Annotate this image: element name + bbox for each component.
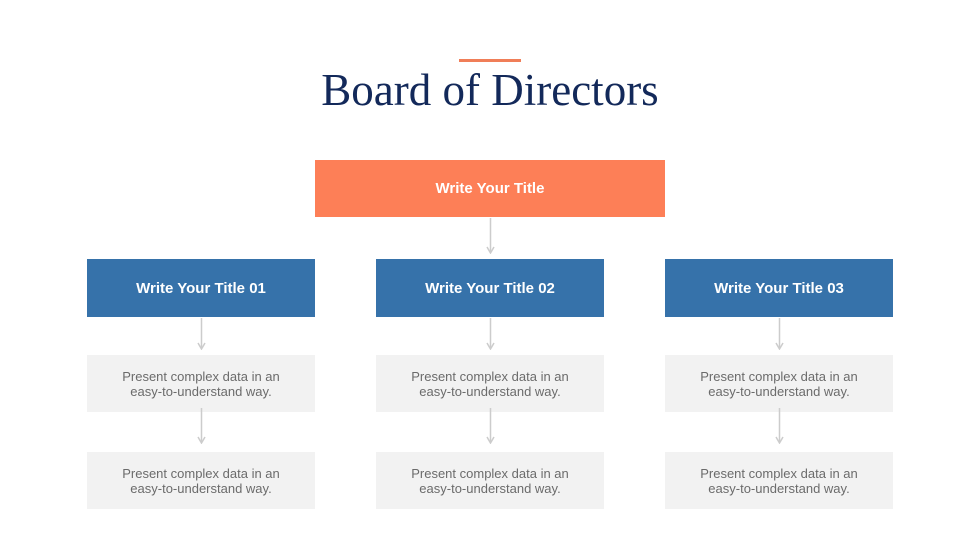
column 2 [376, 259, 604, 509]
arrow [776, 318, 784, 350]
title box 02 [376, 259, 604, 317]
title box 02: Write Your Title 02 [425, 280, 555, 296]
title box 01 [87, 259, 315, 317]
text box: Present complex data in an [411, 368, 569, 384]
text box: Present complex data in an [700, 466, 858, 480]
text box: easy-to-understand way. [130, 480, 272, 496]
text box [376, 355, 604, 412]
arrow [486, 318, 494, 350]
title box 03 [665, 259, 893, 317]
text box: Present complex data in an [122, 368, 280, 384]
arrow [776, 408, 784, 444]
column 3 [665, 259, 893, 509]
text box [665, 355, 893, 412]
text box: Present complex data in an [122, 466, 280, 480]
title: Board of Directors [321, 65, 659, 115]
title box 01: Write Your Title 01 [136, 280, 266, 296]
text box [376, 452, 604, 509]
text box: Present complex data in an [700, 368, 858, 384]
top box [315, 160, 665, 217]
arrow [198, 318, 206, 350]
text box: easy-to-understand way. [130, 384, 272, 398]
text box: easy-to-understand way. [419, 480, 561, 496]
title box 03: Write Your Title 03 [714, 280, 844, 296]
text box [87, 452, 315, 509]
text box: easy-to-understand way. [419, 384, 561, 398]
text box [665, 452, 893, 509]
arrow: top to middle [486, 218, 494, 254]
arrow [198, 408, 206, 444]
text box: Present complex data in an [411, 466, 569, 480]
accent line [459, 59, 521, 62]
arrow [486, 408, 494, 444]
text box [87, 355, 315, 412]
top box: Write Your Title [436, 180, 544, 197]
text box: easy-to-understand way. [708, 480, 850, 496]
text box: easy-to-understand way. [708, 384, 850, 398]
